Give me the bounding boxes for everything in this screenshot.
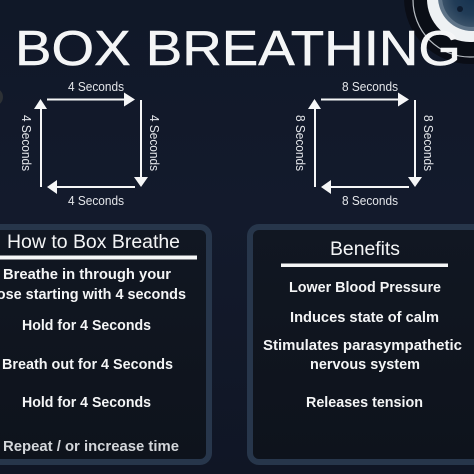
benefit 4: Releases tension [306,395,423,411]
left edge object [0,88,3,106]
benefit 3 [263,338,462,373]
benefit 3: nervous system [310,357,420,373]
step 1: Breathe in through your [3,267,171,283]
arrows: 4 second cycle [34,92,148,194]
label: top: 4 Seconds [68,79,124,94]
title: BOX BREATHING [15,22,461,76]
lens decoration [404,0,474,64]
step 4: Hold for 4 Seconds [22,395,151,411]
diagram: 4 second box [19,79,162,208]
benefit 3: Stimulates parasympathetic [263,338,462,354]
benefit 1: Lower Blood Pressure [289,280,441,296]
repeat note: Repeat / or increase time [3,439,179,455]
label: right: 4 Seconds [147,115,162,171]
diagram: 8 second box [293,79,436,208]
label: left: 8 Seconds [293,115,308,171]
benefit 2: Induces state of calm [290,310,439,326]
panel frame [0,227,209,462]
step 1 [0,267,186,303]
label: bottom: 8 Seconds [342,193,398,208]
step 2: Hold for 4 Seconds [22,318,151,334]
step 3: Breath out for 4 Seconds [2,357,173,373]
panel: benefits [250,227,474,462]
heading rule [281,264,448,267]
label: right: 8 Seconds [421,115,436,171]
panel: how to box breathe [0,227,209,462]
panel heading: Benefits [330,239,400,260]
arrows: 8 second cycle [308,92,422,194]
panel frame [250,227,474,462]
label: left: 4 Seconds [19,115,34,171]
label: top: 8 Seconds [342,79,398,94]
panel heading: How to Box Breathe [7,232,180,253]
heading rule [0,256,197,260]
label: bottom: 4 Seconds [68,193,124,208]
